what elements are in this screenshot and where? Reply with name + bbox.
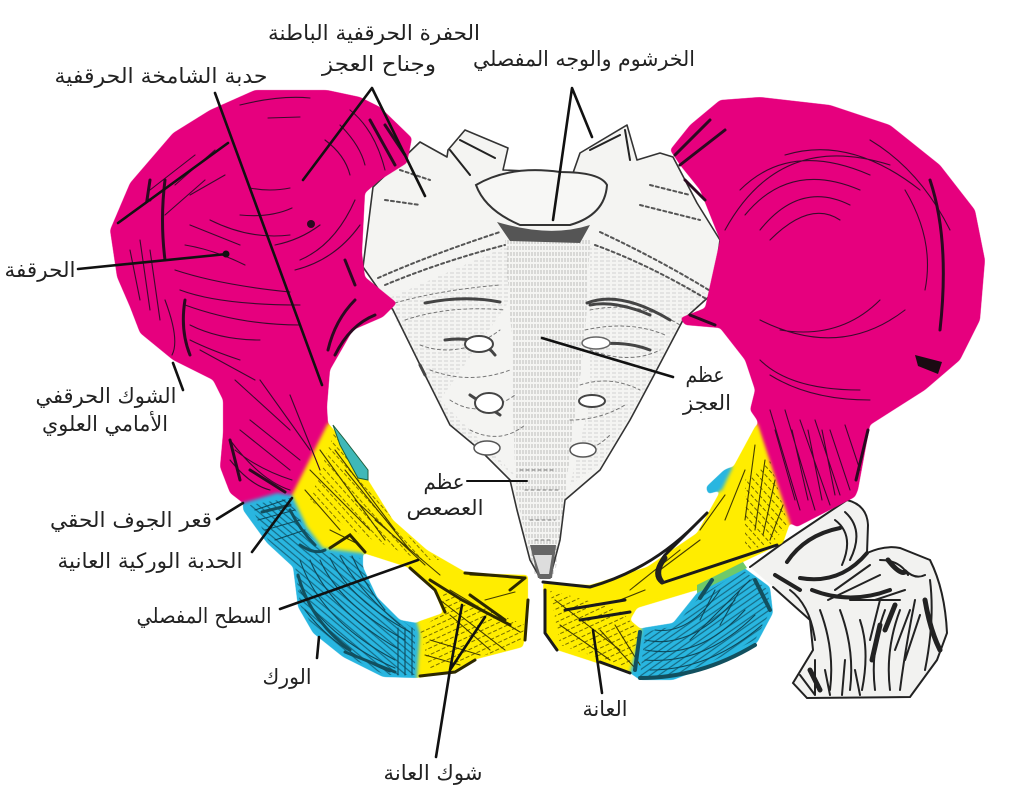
right pubis and ramus line work — [543, 445, 788, 673]
leader lines — [78, 88, 673, 757]
label: iliac fossa and sacral wing — [268, 21, 480, 76]
label: pubis: العانة — [582, 697, 628, 721]
label: iliac fossa and sacral wing: وجناح العجز — [321, 52, 436, 76]
label: anterior superior iliac spine: الأمامي العلوي — [42, 411, 168, 436]
label: sacrum — [682, 363, 731, 415]
label: iliopubic eminence: الحدبة الوركية العانية — [58, 549, 243, 573]
femur bone — [750, 500, 947, 698]
left ilium line work — [130, 97, 405, 492]
right hip colour regions — [543, 97, 985, 680]
right ischium line work — [635, 562, 770, 678]
label: sacrum: عظم — [686, 363, 724, 388]
label: anterior superior iliac spine — [36, 384, 176, 436]
label: acetabular fossa: قعر الجوف الحقي — [50, 508, 212, 532]
sacrum and coccyx — [363, 125, 720, 578]
left ischium line work — [250, 498, 415, 675]
label: coccyx: العصعص — [406, 496, 484, 520]
left hip colour regions — [110, 90, 528, 678]
label: iliac crest tubercle: حدبة الشامخة الحرقفية — [54, 64, 268, 88]
label: ilium: الحرقفة — [4, 258, 76, 282]
label: pubic spine: شوك العانة — [384, 761, 482, 785]
label: ischium: الورك — [262, 665, 312, 689]
label: articular surface: السطح المفصلي — [136, 604, 272, 628]
label: sacrum: العجز — [682, 391, 731, 415]
label: anterior superior iliac spine: الشوك الحرقفي — [36, 384, 176, 408]
label: coccyx: عظم — [424, 470, 464, 495]
label: promontory and articular face: الخرشوم والوجه المفصلي — [473, 47, 695, 71]
label: iliac fossa and sacral wing: الحفرة الحرقفية الباطنة — [268, 21, 480, 45]
right ilium line work — [675, 120, 950, 510]
label: coccyx — [406, 470, 484, 520]
left pubis and ramus line work — [305, 425, 528, 676]
